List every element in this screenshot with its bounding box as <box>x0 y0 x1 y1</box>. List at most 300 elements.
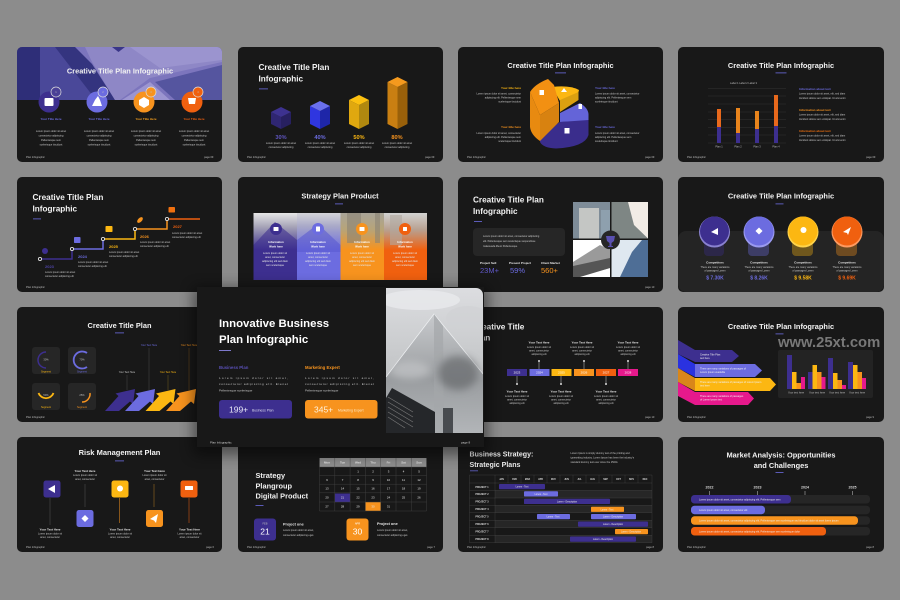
values: There are many variations <box>744 266 774 269</box>
timeline blocks: 2023 <box>514 370 521 374</box>
upper notes: Lorem ipsum dolor sit <box>570 346 594 349</box>
calendar: 11 <box>402 478 405 482</box>
gantt chart: PROJECT 4 <box>475 508 489 511</box>
panel: slide 3 3D pie: page 09 <box>645 155 655 159</box>
lower notes: amet, consectetur <box>596 398 616 402</box>
gantt chart: DEC <box>643 479 648 481</box>
title: Creative Title Plan <box>88 321 152 330</box>
stats: 59% <box>510 266 525 275</box>
title: Infographic <box>473 207 518 216</box>
columns: Lorem ipsum dolor sit <box>393 252 417 255</box>
year axis <box>706 486 856 495</box>
text columns: Your Title Here <box>40 117 62 121</box>
calendar: 28 <box>341 504 344 508</box>
calendar: 4 <box>403 470 405 474</box>
calendar: 6 <box>326 478 328 482</box>
icon: circle 1 <box>38 87 61 112</box>
side notes: Lorem ipsum dolor sit amet, elit, sed diam <box>799 134 845 138</box>
title: Strategic Plans <box>470 462 520 469</box>
panel: slide 10 milestones <box>458 307 663 422</box>
stats: Present Project <box>509 261 531 265</box>
icon tiles <box>44 480 198 527</box>
captions <box>266 142 412 149</box>
text columns: Lorem ipsum dolor sit amet <box>36 130 66 133</box>
photo: skyscraper <box>386 288 483 433</box>
title <box>258 63 329 84</box>
lower notes: adipiscing elit <box>553 402 569 405</box>
year labels: 2023 <box>45 264 55 269</box>
year labels: 2027 <box>173 224 183 229</box>
title: Plan <box>473 334 490 342</box>
calendar: 23 <box>371 496 375 500</box>
button: 199+ <box>219 400 292 418</box>
grouped bar chart: Your text here <box>849 390 866 394</box>
title <box>32 193 103 214</box>
text columns: consectetur adipiscing <box>39 134 64 138</box>
lower notes: amet, consectetur <box>551 398 571 402</box>
column: marketing expert: Lorem ipsum dolor sit amet, <box>305 376 374 380</box>
calendar: 20 <box>325 496 329 500</box>
columns: amet, consectetur <box>265 256 285 259</box>
panel: slide 16 market analysis: page 8 <box>866 545 874 549</box>
upper notes: Lorem ipsum dolor sit <box>527 346 551 349</box>
calendar <box>320 458 426 511</box>
icon: circle 3 <box>134 87 156 112</box>
notes: amet, consectetur <box>40 536 60 539</box>
panel: slide 7 stats and photos: page 10 <box>645 285 655 289</box>
values: There are many variations <box>700 266 730 269</box>
text columns: Pellentesque sem <box>89 139 109 142</box>
year labels: 2024 <box>78 254 88 259</box>
columns: adipiscing elit sed diam <box>392 260 418 263</box>
panel: slide 9 donuts and arrows <box>17 307 222 422</box>
notes: Lorem ipsum dolor sit <box>73 474 97 477</box>
grouped bar chart: Your text here <box>788 390 805 394</box>
gantt chart: MAR <box>525 478 530 481</box>
calendar: 18 <box>402 486 405 490</box>
step text <box>45 232 202 278</box>
text columns: Lorem ipsum dolor sit amet <box>84 130 114 133</box>
arrow labels <box>119 344 198 390</box>
captions: Lorem ipsum dolor sit amet <box>305 142 335 145</box>
upper notes: Your Text Here <box>529 340 550 344</box>
panel: slide 2 3D bars: Plan Infographic <box>247 155 266 159</box>
captions: consectetur adipiscing <box>308 146 333 149</box>
columns: Work here <box>398 244 412 248</box>
date tile 21: FEB <box>262 522 268 526</box>
notes <box>38 469 202 539</box>
text box <box>473 228 565 256</box>
notes: amet, consectetur <box>145 478 165 481</box>
side notes: Lorem ipsum dolor sit amet, elit, sed diam <box>799 114 845 116</box>
calendar: 3 <box>388 470 390 474</box>
upper notes: adipiscing elit <box>574 353 590 356</box>
title <box>727 450 835 470</box>
lower notes: amet, consectetur <box>507 398 527 402</box>
columns: sem scelerisque <box>353 264 372 267</box>
bar 30% <box>271 107 291 129</box>
calendar: 16 <box>371 486 375 490</box>
progress bars: Lorem ipsum dolor sit amet, consectetur adipiscing elit. Pellentesque sem scelerisque dolor <box>699 530 800 534</box>
title: Creative Title Plan Infographic <box>67 66 173 76</box>
lower notes: Lorem ipsum dolor sit <box>505 395 529 398</box>
side notes: Information about text <box>799 87 831 91</box>
timeline blocks: 2028 <box>625 370 632 374</box>
calendar: 31 <box>387 504 390 508</box>
notes: Your Text Here <box>144 469 165 473</box>
donut tiles: Segment <box>41 370 51 374</box>
grouped bar chart: Your text here <box>809 390 826 394</box>
left labels: adipiscing elit. Pellentesque sem <box>485 136 521 139</box>
text columns: scelerisque tincidunt <box>135 144 158 146</box>
columns: Lorem ipsum dolor sit <box>350 252 374 255</box>
upper notes: adipiscing elit <box>620 353 636 356</box>
project note 2: Lorem ipsum dolor sit amet, <box>377 529 408 532</box>
lower notes: Your Text Here <box>551 390 572 394</box>
gantt chart: FEB <box>512 479 517 481</box>
progress bars <box>691 495 870 536</box>
calendar: 30 <box>371 504 375 508</box>
arrow labels: Your Text Here <box>181 344 198 347</box>
lower notes: Lorem ipsum dolor sit <box>594 395 618 398</box>
upper notes: amet, consectetur <box>529 350 549 352</box>
icon: circle 4: 4 <box>197 90 199 94</box>
title: Market Analysis: Opportunities <box>727 450 835 460</box>
ribbon arrows: There are many variations of passages of Lorem Ipsum <box>700 381 761 384</box>
step text: Lorem ipsum dolor sit amet <box>109 251 139 254</box>
lower notes: adipiscing elit <box>598 402 614 405</box>
icon: circle 2 <box>86 87 108 112</box>
gantt chart: PROJECT 8 <box>475 538 489 541</box>
right labels: Your title here <box>595 125 615 129</box>
panel: slide 2 3D bars: page 09 <box>425 155 435 159</box>
year axis: 2022 <box>706 486 714 490</box>
title: Infographic <box>32 204 78 214</box>
title: Strategy <box>256 471 286 480</box>
ribbon arrows: of Lorem Ipsum text <box>700 398 722 402</box>
gantt chart: Lorem - Description <box>593 538 614 541</box>
panel: slide 4 stacked bars: Plan Infographic <box>687 155 706 159</box>
calendar: 27 <box>325 504 329 508</box>
panel: slide 16 market analysis: Plan Infographic <box>687 545 706 549</box>
project note 2: Project one <box>377 522 398 526</box>
notes: Lorem ipsum dolor sit <box>143 474 167 477</box>
left labels <box>477 86 521 143</box>
columns: amet, consectetur <box>352 256 372 259</box>
calendar: 5 <box>418 470 420 474</box>
panel: slide 11 ribbons and bars <box>678 307 884 422</box>
donut tiles: Segment <box>41 406 51 409</box>
captions: Lorem ipsum dolor sit amet <box>266 142 296 145</box>
step text: consectetur adipiscing elit <box>109 255 138 258</box>
columns: Lorem ipsum dolor sit <box>306 252 330 255</box>
columns: Information <box>397 240 413 244</box>
captions: Lorem ipsum dolor sit amet <box>382 142 412 145</box>
lower notes: Your Text Here <box>596 390 617 394</box>
panel: slide 7 stats and photos <box>458 177 663 292</box>
upper notes: Your Text Here <box>618 340 639 344</box>
text columns: scelerisque tincidunt <box>88 144 111 146</box>
date tile 21: 21 <box>260 526 270 536</box>
progress bars: Lorem ipsum dolor sit amet, consectetur elit <box>699 509 748 512</box>
gantt chart: Lorem - Text <box>516 486 529 488</box>
side notes: Lorem ipsum dolor sit amet, elit, sed diam <box>799 92 845 96</box>
lower notes: Lorem ipsum dolor sit <box>549 395 573 398</box>
left labels: Lorem ipsum dolor sit amet, consectetur <box>477 132 521 135</box>
bar 50% <box>349 95 369 129</box>
icon: circle 4 <box>182 87 203 112</box>
stacked bar chart: Plan 2 <box>734 144 742 148</box>
calendar: 13 <box>325 486 329 490</box>
button: 345+: Marketing Expert <box>338 408 364 412</box>
text columns: Pellentesque sem <box>136 139 156 142</box>
upper notes: Your Text Here <box>572 340 593 344</box>
upper notes: amet, consectetur <box>572 350 592 352</box>
icon: circle 1: 1 <box>55 90 57 94</box>
text columns: scelerisque tincidunt <box>40 144 63 146</box>
title <box>473 322 525 342</box>
step text: Lorem ipsum dolor sit amet <box>78 261 108 264</box>
panel: slide 15 gantt <box>458 437 663 552</box>
panel: slide 3 3D pie <box>458 47 663 162</box>
step text: Lorem ipsum dolor sit amet <box>172 232 202 235</box>
columns: adipiscing elit sed diam <box>305 260 331 263</box>
columns <box>254 213 427 280</box>
values <box>700 260 862 282</box>
notes: Lorem ipsum dolor sit <box>38 532 62 536</box>
progress bars: Lorem ipsum dolor sit amet, consectetur adipiscing elit. Pellentesque sem scelerisque sed tincidunt dolor sit amet lorem ipsum <box>699 520 839 522</box>
reflections <box>704 241 857 256</box>
title: and Challenges <box>754 461 808 470</box>
ribbon arrows: There are many variations of passages <box>700 395 744 398</box>
gantt chart: PROJECT 5 <box>475 516 489 518</box>
title <box>256 471 309 500</box>
gantt chart: JUN <box>564 479 569 481</box>
lower notes: adipiscing elit <box>509 402 525 405</box>
calendar: 7 <box>342 478 344 482</box>
title: Creative Title Plan Infographic <box>728 322 834 331</box>
photo banner <box>17 47 222 100</box>
gantt chart: Lorem - Description <box>603 523 624 526</box>
calendar: 22 <box>356 496 360 500</box>
shadow: center slide <box>193 287 488 455</box>
panel: slide 13 risk management: Plan Infographic <box>26 545 45 549</box>
column: business plan <box>219 365 288 392</box>
column: business plan: Lorem ipsum dolor sit amet, <box>219 376 288 380</box>
notes: amet, consectetur <box>110 536 130 539</box>
timeline blocks: 2024 <box>536 370 543 374</box>
title: Infographic <box>258 74 304 84</box>
step text: Lorem ipsum dolor sit amet <box>45 271 75 274</box>
icon: circle 2: 2 <box>102 90 104 94</box>
project note 2: consectetur adipiscing eget. <box>377 534 408 537</box>
text columns: Pellentesque sem <box>184 139 204 142</box>
text columns: consectetur adipiscing <box>87 134 112 138</box>
stats: 560+ <box>541 266 559 275</box>
side notes: Information about text <box>799 108 831 112</box>
pie chart <box>530 79 588 148</box>
title: Creative Title Plan Infographic <box>728 192 834 200</box>
year labels: 2025 <box>109 244 119 249</box>
upper notes: Lorem ipsum dolor sit <box>616 346 640 349</box>
bar 40% <box>310 101 330 129</box>
text columns: Lorem ipsum dolor sit amet <box>179 130 209 133</box>
date tile 30: APR <box>355 522 360 526</box>
panel: slide 15 gantt: Plan Infographic <box>467 545 486 549</box>
text columns: consectetur adipiscing <box>134 134 159 138</box>
footer: Plan Infographic <box>210 440 232 444</box>
values: $ 9.69K <box>838 276 856 282</box>
calendar: 26 <box>417 496 421 500</box>
year axis: 2023 <box>754 486 762 490</box>
panel: slide 8 circles and values <box>678 177 884 292</box>
notes: Your Text Here <box>40 528 61 532</box>
captions: consectetur adipiscing <box>385 146 410 149</box>
intro text <box>570 452 635 464</box>
values: There are many variations <box>788 266 818 269</box>
project note 2 <box>377 522 408 537</box>
column: business plan: consectetur adipiscing elit. Etenet <box>219 382 288 386</box>
calendar: 19 <box>417 486 421 490</box>
title: Plan Infographic <box>219 334 308 346</box>
percentages <box>275 135 403 141</box>
gantt chart: Lorem - Text <box>535 493 548 496</box>
calendar: Sun <box>416 460 422 464</box>
values: Competitors <box>706 260 724 264</box>
project note 1: Lorem ipsum dolor sit amet, <box>283 529 314 532</box>
arrow labels: Your Text Here <box>141 344 158 347</box>
year labels <box>45 224 183 269</box>
right labels: scelerisque tincidunt <box>595 100 618 104</box>
panel: slide 6 strategy columns <box>238 177 443 292</box>
text columns: Your Title Here <box>135 117 157 121</box>
side notes: tincidunt dolore sem volutpat. Ut wisi enim <box>799 97 846 100</box>
values: There are many variations <box>832 266 862 269</box>
stats <box>480 261 560 275</box>
calendar: 14 <box>341 486 344 490</box>
project note 1: Project one <box>283 522 304 526</box>
text columns: Pellentesque sem <box>41 139 61 142</box>
title: Creative Title Plan Infographic <box>507 61 614 70</box>
left labels: adipiscing elit. Pellentesque sem <box>485 96 521 100</box>
calendar: 8 <box>357 478 359 482</box>
panel: slide 1 four circles <box>17 47 222 162</box>
date tile 21 <box>254 518 276 540</box>
gantt chart: PROJECT 6 <box>475 523 489 526</box>
upper notes: amet, consectetur <box>618 350 638 352</box>
notes: Your Text Here <box>75 469 96 473</box>
panel: slide 14 calendar: Plan Infographic <box>247 545 266 549</box>
panel: slide 3 3D pie: Plan Infographic <box>467 155 486 159</box>
donut tiles: Segment <box>77 370 87 374</box>
stacked bar chart: Plan 3 <box>753 144 761 148</box>
columns: adipiscing elit sed diam <box>262 260 288 263</box>
footer <box>210 440 471 444</box>
gantt chart: PROJECT 2 <box>475 493 489 496</box>
stacked bar chart: Plan 4 <box>772 144 780 148</box>
calendar: Thu <box>370 460 376 464</box>
ribbon arrows: text here <box>700 384 710 388</box>
button: 199+: 199+ <box>229 404 248 414</box>
gantt chart: JAN <box>499 478 504 481</box>
columns: Information <box>354 240 370 244</box>
panel: slide 13 risk management: page 6 <box>206 545 214 549</box>
panel: slide 14 calendar <box>238 437 443 552</box>
panel: slide 5 stair timeline <box>17 177 222 292</box>
step text: consectetur adipiscing elit <box>140 245 169 248</box>
panel: slide 1 four circles: page 09 <box>204 155 214 159</box>
calendar: 2 <box>372 470 374 474</box>
date tile 30: 30 <box>353 526 362 536</box>
notes: Your Text Here <box>179 528 200 532</box>
columns: Information <box>268 240 284 244</box>
values: $ 7.30K <box>706 276 724 282</box>
percentages: 40% <box>314 135 326 141</box>
column: marketing expert: Pellentesque scelerisque <box>305 388 339 392</box>
gantt chart: Lorem - Text <box>601 508 614 511</box>
calendar: 29 <box>356 504 360 508</box>
stats: Project Sell <box>480 261 497 265</box>
text columns: consectetur adipiscing <box>182 134 207 138</box>
step text: Lorem ipsum dolor sit amet <box>140 241 170 244</box>
notes: amet, consectetur <box>180 536 200 539</box>
gantt chart: Lorem - Description <box>621 530 642 534</box>
ribbon arrows: Lorem Ipsum available <box>700 371 726 374</box>
arrows <box>105 389 196 411</box>
upper notes: adipiscing elit <box>531 353 547 356</box>
notes: Lorem ipsum dolor sit <box>108 532 132 536</box>
gantt chart: PROJECT 3 <box>475 500 489 504</box>
stats: Client Market <box>541 261 560 265</box>
panel: slide 4 stacked bars <box>678 47 884 162</box>
notes: Lorem ipsum dolor sit <box>178 532 202 536</box>
step icons <box>42 207 175 254</box>
year axis: 2024 <box>801 486 809 490</box>
title: Business Strategy: <box>470 452 533 458</box>
percentages: 80% <box>391 135 403 141</box>
timeline blocks: 2026 <box>581 370 588 374</box>
columns: Information <box>310 240 326 244</box>
calendar: 21 <box>341 496 344 500</box>
columns: sem scelerisque <box>309 264 328 267</box>
right labels: Lorem ipsum dolor sit amet, consectetur <box>595 92 640 96</box>
gantt chart: APR <box>538 478 543 481</box>
side notes: tincidunt dolore sem volutpat. Ut wisi enim <box>799 139 846 142</box>
columns: Lorem ipsum dolor sit <box>263 252 287 255</box>
column: marketing expert: consectetur adipiscing elit. Etenet <box>305 382 374 386</box>
footer: page 8 <box>461 440 471 444</box>
grouped bar chart <box>778 350 873 398</box>
notes: amet, consectetur <box>75 478 95 481</box>
timeline blocks <box>507 369 638 376</box>
progress bars: Lorem ipsum dolor sit amet, consectetur adipiscing elit. Pellentesque sem <box>699 498 780 502</box>
panel: slide 11 ribbons and bars: page 9 <box>866 415 874 419</box>
grouped bar chart: Your text here <box>829 390 846 394</box>
gantt chart: JUL <box>577 479 582 481</box>
ribbon arrows <box>678 340 776 405</box>
ribbon arrows: There are many variations of passages of <box>700 368 746 370</box>
timeline blocks: 2025 <box>558 370 565 374</box>
button: 199+: Business Plan <box>252 408 274 412</box>
columns: sem scelerisque <box>266 264 285 267</box>
side notes: tincidunt dolore sem volutpat. Ut wisi enim <box>799 118 846 121</box>
project note 1: consectetur adipiscing eget. <box>283 534 314 537</box>
right labels <box>595 86 640 143</box>
panel: slide 4 stacked bars: page 09 <box>866 155 876 159</box>
title <box>470 452 533 469</box>
gantt chart: OCT <box>616 479 622 481</box>
gantt chart <box>470 475 652 543</box>
